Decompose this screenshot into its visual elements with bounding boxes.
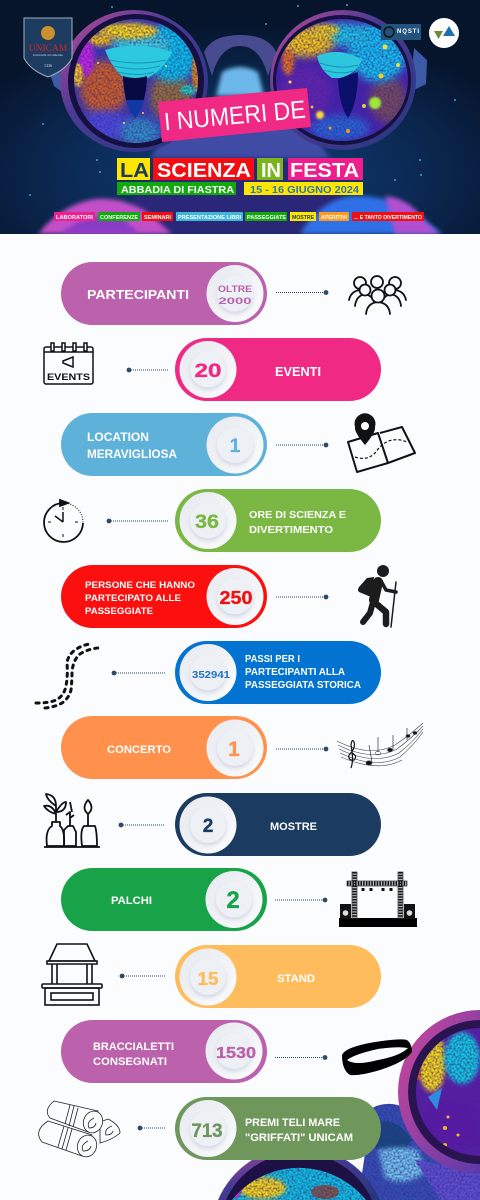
star specks <box>29 4 456 196</box>
tags row: CONFERENZE <box>100 215 138 221</box>
row 2: eventi: EVENTI <box>275 365 321 379</box>
tags row: PASSEGGIATE <box>247 215 286 221</box>
row 8: mostre: MOSTRE <box>270 821 317 833</box>
banner: I numeri de: I NUMERI DE <box>163 96 307 136</box>
snout grain <box>358 1104 480 1200</box>
icon: music staff <box>337 723 423 768</box>
tags row: SEMINARI <box>144 215 172 221</box>
left lens <box>60 10 208 152</box>
icon: market stand <box>42 944 102 1005</box>
row 7: concerto <box>61 716 267 779</box>
nose <box>216 67 264 96</box>
row 4: ore: DIVERTIMENTO <box>249 524 333 536</box>
icon: wristband <box>342 1039 412 1075</box>
bottom-right decorative art <box>218 1010 480 1200</box>
row 11: braccialetti <box>61 1020 267 1083</box>
row 9: palchi <box>61 868 267 931</box>
connector 7 <box>276 747 328 751</box>
connector 12 <box>138 1126 165 1130</box>
row 3: location <box>61 413 267 476</box>
right lens <box>270 10 416 150</box>
row 5: persone: PARTECIPATO ALLE <box>85 593 181 604</box>
glasses bridge <box>204 35 276 76</box>
connector 6 <box>112 671 165 675</box>
lower lens rim <box>218 1146 380 1200</box>
logo: white circle <box>429 18 459 48</box>
connector 4 <box>107 519 168 523</box>
bridge window <box>376 1121 412 1151</box>
frog head and arms <box>38 121 442 234</box>
row 12: premi <box>175 1097 381 1160</box>
icon: events calendar: EVENTS <box>47 372 90 382</box>
row 11: braccialetti: BRACCIALETTI <box>93 1041 174 1053</box>
logo: NQSTI: NQSTI <box>397 29 419 35</box>
nose highlight <box>378 1148 426 1182</box>
logo: Unicam shield: 1336 <box>44 63 52 68</box>
connector 10 <box>120 974 165 978</box>
title: la scienza in festa: IN <box>261 160 281 182</box>
row 10: stand: 15 <box>198 969 218 989</box>
tags row: ... E TANTO DIVERTIMENTO <box>354 215 422 221</box>
connector 11 <box>275 1055 327 1060</box>
connector 3 <box>276 443 328 447</box>
row 10: stand: STAND <box>277 973 315 985</box>
header banner <box>0 0 480 234</box>
lower lens dark ring <box>226 1153 372 1200</box>
logo: Unicam shield: UNICAM <box>29 44 68 54</box>
snout texture <box>358 1104 480 1200</box>
row 4: ore <box>175 489 381 552</box>
row 1: partecipanti: PARTECIPANTI <box>87 287 189 302</box>
row 1: partecipanti: 2000 <box>218 296 252 307</box>
tags row <box>54 212 424 221</box>
row 1: partecipanti: OLTRE <box>218 284 252 295</box>
icon: stage <box>339 872 417 927</box>
icon: footprints <box>36 644 98 708</box>
tags row: PRESENTAZIONE LIBRI <box>178 215 242 221</box>
row 10: stand <box>175 945 381 1008</box>
row 8: mostre <box>175 793 381 856</box>
row 6: passi <box>175 641 381 704</box>
title: la scienza in festa: LA <box>120 160 149 182</box>
row 6: passi: 352941 <box>192 670 230 681</box>
row 6: passi: PASSI PER I <box>245 654 300 665</box>
row 5: persone: PERSONE CHE HANNO <box>85 580 195 591</box>
tags row: APERITIVI <box>321 215 347 221</box>
row 9: palchi: PALCHI <box>111 895 152 907</box>
icon: events calendar <box>44 343 93 384</box>
logo: Unicam shield: Università di Camerino <box>33 53 63 57</box>
title: la scienza in festa <box>117 158 363 182</box>
row 8: mostre: 2 <box>203 816 213 837</box>
icon: hiker <box>358 565 396 627</box>
title: la scienza in festa: SCIENZA <box>157 160 251 182</box>
venue: ABBADIA DI FIASTRA <box>121 184 234 196</box>
connector 5 <box>276 595 328 599</box>
right lens <box>416 1028 480 1156</box>
connector 2 <box>127 368 168 372</box>
tags row: MOSTRE <box>292 215 314 221</box>
row 9: palchi: 2 <box>226 887 240 914</box>
row 11: braccialetti: CONSEGNATI <box>93 1056 167 1068</box>
glasses temples <box>50 48 427 92</box>
row 3: location: LOCATION <box>87 432 149 444</box>
row 4: ore: ORE DI SCIENZA E <box>249 509 346 521</box>
row 7: concerto: CONCERTO <box>107 744 171 756</box>
lower lens <box>232 1165 366 1200</box>
row 3: location: MERAVIGLIOSA <box>87 449 177 461</box>
row 11: braccialetti: 1530 <box>216 1045 256 1062</box>
row 12: premi: PREMI TELI MARE <box>245 1117 340 1129</box>
row 1: partecipanti <box>61 262 267 325</box>
row 2: eventi: 20 <box>194 361 222 382</box>
row 6: passi: PASSEGGIATA STORICA <box>245 680 361 691</box>
pink snout patch <box>415 1160 480 1200</box>
row 4: ore: 36 <box>195 512 219 533</box>
right lens dark ring <box>408 1020 480 1164</box>
row 7: concerto: 1 <box>228 738 240 761</box>
icon: people <box>349 276 406 314</box>
logo: Unicam shield <box>24 18 72 77</box>
icon: map pin <box>348 413 415 472</box>
icon: rolled towels <box>39 1101 120 1160</box>
row 12: premi: 713 <box>192 1121 222 1142</box>
icon: plants in bottles <box>44 794 100 847</box>
row 5: persone: 250 <box>220 588 252 608</box>
row 2: eventi <box>175 338 381 401</box>
row 3: location: 1 <box>230 436 241 457</box>
logo: NQSTI <box>381 24 421 40</box>
row 12: premi: "GRIFFATI" UNICAM <box>245 1132 353 1144</box>
row 5: persone: PASSEGGIATE <box>85 606 153 617</box>
date: 15 - 16 GIUGNO 2024 <box>250 184 359 196</box>
right lens rim <box>398 1010 480 1174</box>
connector 1 <box>276 290 328 295</box>
title: la scienza in festa: FESTA <box>290 160 359 182</box>
connector 8 <box>119 823 165 827</box>
icon: clock <box>44 500 83 542</box>
connector 9 <box>275 898 327 902</box>
row 6: passi: PARTECIPANTI ALLA <box>245 667 345 678</box>
row 5: persone <box>61 565 267 628</box>
tags row: LABORATORI <box>56 215 94 221</box>
